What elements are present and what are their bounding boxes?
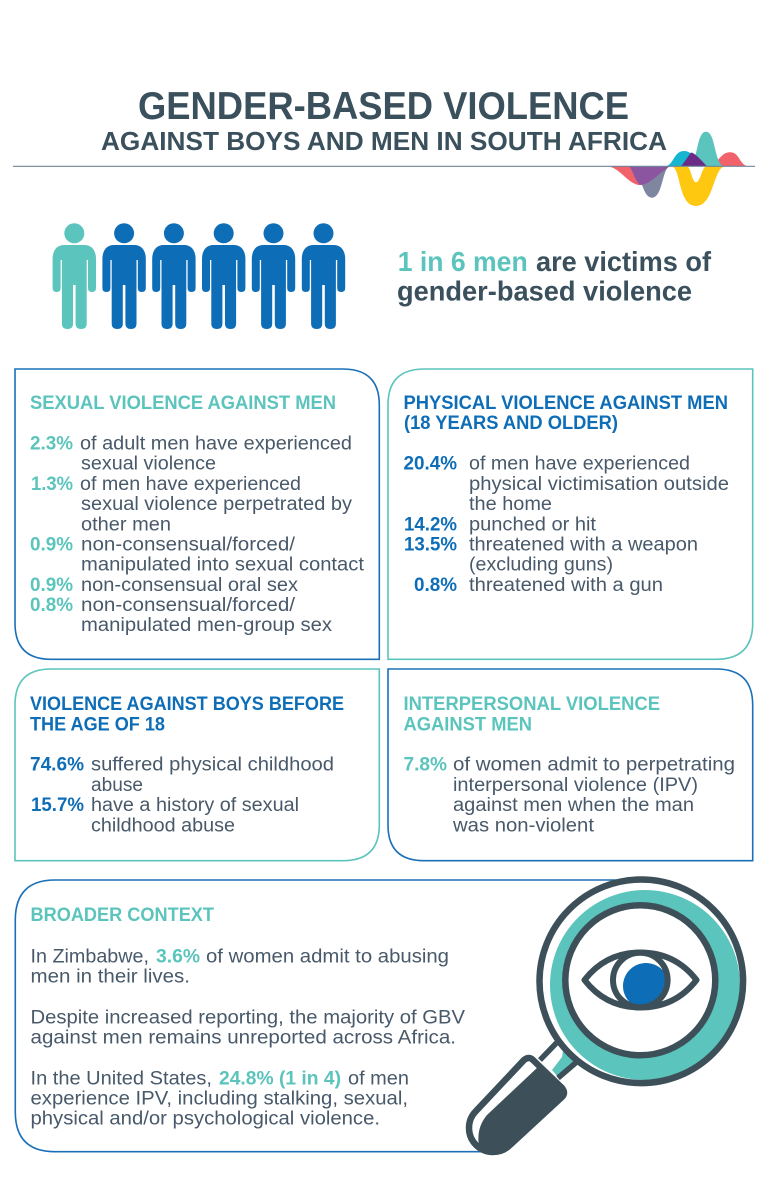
text: Zimbabwe: In Zimbabwe, — [30, 946, 149, 967]
statistics list: manipulated into sexual contact — [81, 555, 365, 576]
text: Zimbabwe: men in their lives. — [30, 967, 190, 988]
title — [101, 85, 667, 156]
statistics list: 14.2% — [404, 514, 457, 535]
statistics list: 1.3% — [31, 474, 73, 495]
statistics list: threatened with a weapon — [469, 534, 698, 556]
heading: SEXUAL VIOLENCE AGAINST MEN — [30, 393, 336, 414]
heading: INTERPERSONAL VIOLENCE — [404, 694, 660, 715]
icon: eye — [584, 952, 696, 1009]
text: United States: 24.8% (1 in 4) — [219, 1068, 341, 1089]
statistics list: of women admit to perpetrating — [453, 755, 735, 776]
magnifier lens rings — [540, 880, 743, 1083]
magnifier neck — [540, 1043, 580, 1078]
headline statistic: gender-based violence — [397, 276, 692, 306]
text: United States — [30, 1068, 409, 1130]
wave logo and header rule — [13, 132, 755, 206]
heading: BROADER CONTEXT — [30, 905, 214, 926]
heading: VIOLENCE AGAINST BOYS BEFORE — [30, 694, 344, 715]
statistics list: 20.4% — [404, 454, 457, 475]
icon: man 6 — [302, 223, 345, 329]
text: United States: experience IPV, including stalking, sexual, — [30, 1088, 408, 1110]
statistics list: 2.3% — [30, 434, 73, 454]
title: AGAINST BOYS AND MEN IN SOUTH AFRICA — [101, 128, 667, 156]
icon: highlighted man — [53, 223, 96, 329]
statistics list: manipulated men-group sex — [81, 615, 333, 636]
statistics list: 15.7% — [31, 795, 84, 816]
statistics list: (excluding guns) — [469, 555, 613, 576]
heading: THE AGE OF 18 — [30, 715, 165, 736]
headline statistic: 1 in 6 men — [398, 246, 528, 277]
heading: AGAINST MEN — [404, 715, 532, 736]
statistics list: threatened with a gun — [469, 575, 663, 596]
text: Zimbabwe — [30, 946, 449, 988]
statistics list: 0.8% — [414, 575, 457, 596]
statistics list — [30, 755, 334, 836]
statistics list: was non-violent — [452, 815, 595, 836]
icon: man 2 — [102, 223, 146, 329]
title: GENDER-BASED VIOLENCE — [138, 85, 629, 128]
panel: sexual violence against men — [15, 369, 379, 659]
statistics list: 13.5% — [404, 534, 457, 556]
statistics list: 0.9% — [30, 575, 73, 596]
statistics list: punched or hit — [469, 514, 597, 535]
icon: man 3 — [152, 223, 196, 329]
statistics list: 7.8% — [404, 755, 447, 776]
statistics list: physical victimisation outside — [469, 474, 729, 495]
text: United States: physical and/or psychological violence. — [30, 1109, 380, 1130]
statistics list — [404, 755, 735, 836]
statistics list — [30, 434, 365, 636]
statistics list: 0.9% — [30, 534, 73, 556]
text: Zimbabwe: 3.6% — [156, 946, 200, 967]
heading: PHYSICAL VIOLENCE AGAINST MEN — [404, 393, 728, 414]
statistics list: non-consensual/forced/ — [81, 534, 296, 556]
statistics list: have a history of sexual — [91, 795, 299, 816]
text: United States: In the United States, — [30, 1068, 212, 1089]
panel: interpersonal violence against men — [388, 669, 753, 861]
statistics list: the home — [469, 494, 552, 515]
statistics list: against men when the man — [453, 795, 694, 816]
panel: violence against boys — [15, 669, 379, 861]
statistics list: 0.8% — [30, 595, 73, 616]
pictogram: 1 in 6 men — [53, 223, 345, 329]
heading — [30, 694, 344, 736]
statistics list: 74.6% — [30, 755, 84, 776]
statistics list: non-consensual/forced/ — [81, 595, 296, 616]
headline statistic — [397, 246, 712, 306]
statistics list: of adult men have experienced — [80, 434, 352, 454]
statistics list: interpersonal violence (IPV) — [453, 775, 698, 796]
text: Africa: against men remains unreported across Africa. — [30, 1028, 456, 1048]
heading — [404, 694, 660, 736]
icon: man 4 — [202, 223, 245, 329]
statistics list: other men — [81, 514, 171, 535]
statistics list: sexual violence — [81, 454, 216, 475]
icon: man 5 — [252, 223, 295, 329]
headline statistic: are victims of — [536, 246, 712, 277]
icon: magnifying glass with eye — [469, 880, 743, 1152]
statistics list: sexual violence perpetrated by — [81, 494, 353, 515]
magnifier handle — [469, 1058, 566, 1152]
panel: broader context — [15, 880, 625, 1152]
heading — [404, 393, 728, 434]
text: Zimbabwe: of women admit to abusing — [206, 946, 449, 967]
statistics list: of men have experienced — [80, 474, 301, 495]
statistics list: suffered physical childhood — [91, 755, 334, 776]
text: Africa: Despite increased reporting, the majority of GBV — [30, 1007, 465, 1028]
statistics list: of men have experienced — [469, 454, 690, 475]
panel: physical violence against men — [388, 369, 753, 659]
text: Africa — [30, 1007, 465, 1048]
statistics list: abuse — [91, 775, 143, 796]
statistics list — [404, 454, 729, 596]
statistics list: non-consensual oral sex — [81, 575, 299, 596]
text: United States: of men — [348, 1068, 409, 1089]
statistics list: childhood abuse — [91, 815, 235, 836]
heading: (18 YEARS AND OLDER) — [404, 413, 618, 434]
